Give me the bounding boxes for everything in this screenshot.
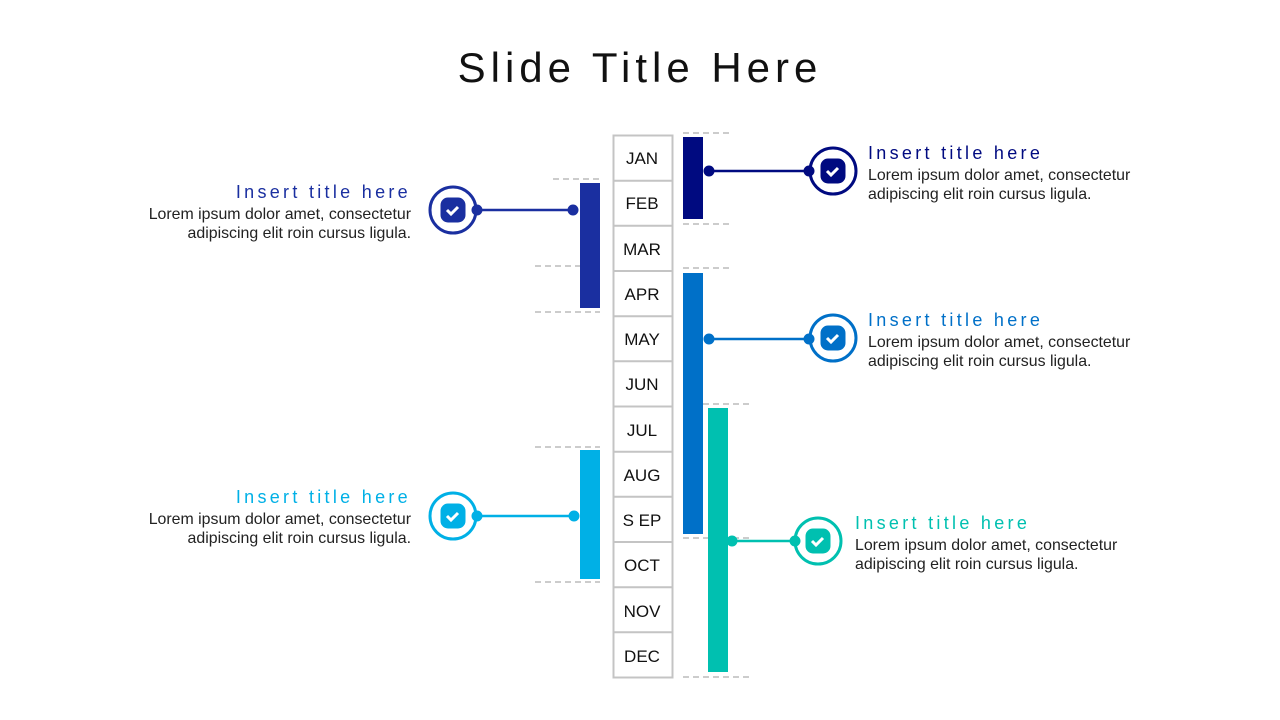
connector 4 xyxy=(430,493,579,539)
month table: JAN xyxy=(626,149,658,168)
text block right 1 xyxy=(868,143,1130,203)
bar Apr-Sep xyxy=(683,273,703,534)
text block right 2: adipiscing elit roin cursus ligula. xyxy=(868,353,1091,370)
text block left 1: Insert title here xyxy=(236,182,411,202)
text block left 2: Insert title here xyxy=(236,487,411,507)
text block right 3: adipiscing elit roin cursus ligula. xyxy=(855,556,1078,573)
month table: JUN xyxy=(625,375,659,394)
month table: FEB xyxy=(625,194,659,213)
text block right 2: Lorem ipsum dolor amet, consectetur xyxy=(868,334,1130,351)
connector 5 xyxy=(727,518,841,564)
text block right 2: Insert title here xyxy=(868,310,1043,330)
month table: NOV xyxy=(624,602,661,621)
text block left 1: Lorem ipsum dolor amet, consectetur xyxy=(149,206,411,223)
text block left 2: Lorem ipsum dolor amet, consectetur xyxy=(149,511,411,528)
bar Jan-Feb xyxy=(683,137,703,219)
month table: AUG xyxy=(624,466,660,485)
month table: DEC xyxy=(624,647,660,666)
text block right 1: Insert title here xyxy=(868,143,1043,163)
text block left 2: adipiscing elit roin cursus ligula. xyxy=(188,530,411,547)
text block right 1: adipiscing elit roin cursus ligula. xyxy=(868,186,1091,203)
text block left 1 xyxy=(149,182,411,242)
text block right 2 xyxy=(868,310,1130,370)
text block left 1: adipiscing elit roin cursus ligula. xyxy=(188,225,411,242)
month table: APR xyxy=(625,285,659,304)
bar Jul-Dec xyxy=(708,408,728,672)
month table: JUL xyxy=(627,421,657,440)
month table xyxy=(613,136,673,678)
month table: S EP xyxy=(623,511,661,530)
month table: MAY xyxy=(624,330,660,349)
connector 2 xyxy=(704,148,856,194)
text block right 3: Insert title here xyxy=(855,513,1030,533)
month table: MAR xyxy=(623,240,661,259)
text block right 3: Lorem ipsum dolor amet, consectetur xyxy=(855,537,1117,554)
connector 3 xyxy=(704,315,856,361)
text block right 3 xyxy=(855,513,1118,573)
title: Slide Title Here xyxy=(458,44,822,91)
bar Feb-Apr xyxy=(580,183,600,308)
text block left 2 xyxy=(149,487,411,547)
bar Aug-Oct xyxy=(580,450,600,579)
month table: OCT xyxy=(624,556,660,575)
connector 1 xyxy=(430,187,578,233)
text block right 1: Lorem ipsum dolor amet, consectetur xyxy=(868,167,1130,184)
